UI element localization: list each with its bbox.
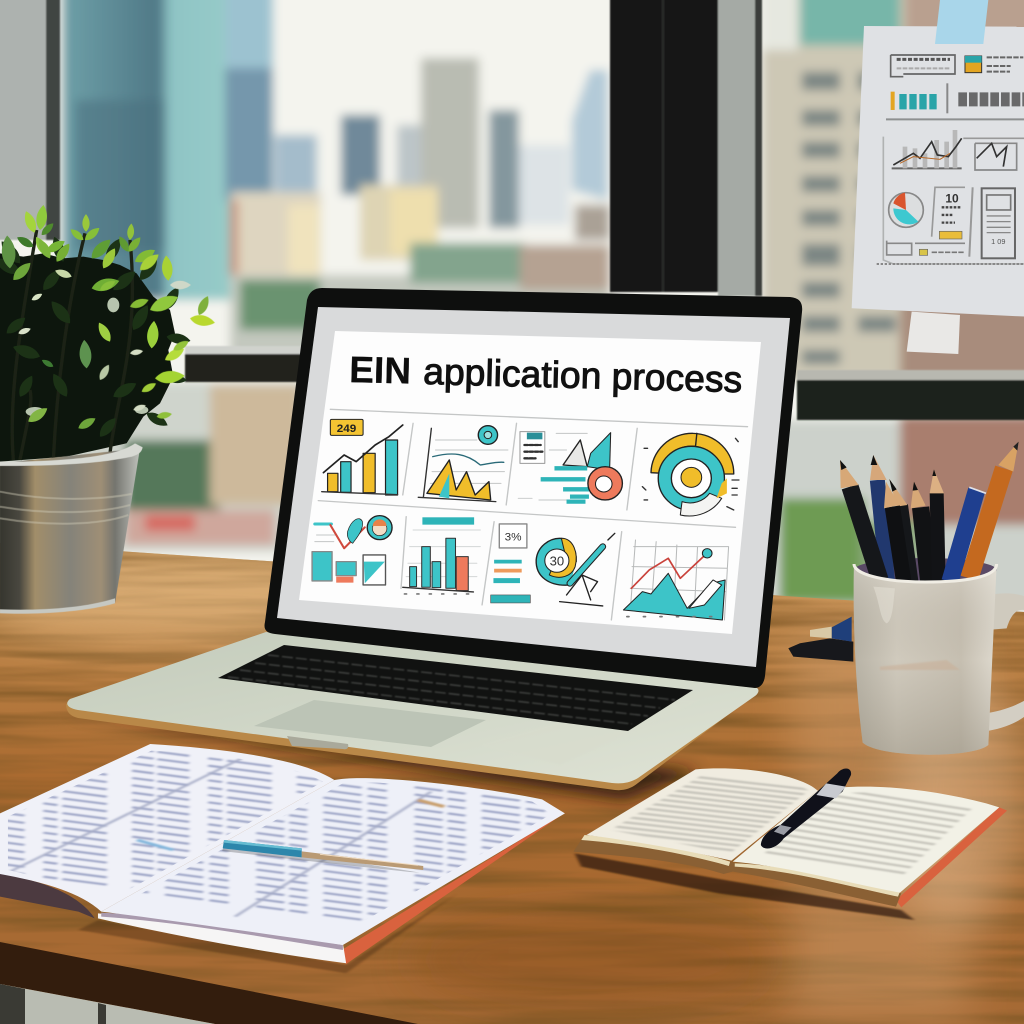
chart 7: stat box, stripes and donut — [491, 524, 615, 606]
right page — [101, 778, 565, 945]
top tape — [935, 0, 988, 44]
dark leaves — [0, 235, 191, 440]
chart 7: stat box, stripes and donut: 3% — [505, 532, 522, 544]
poster header row — [886, 55, 1024, 119]
lower right view — [770, 420, 1024, 610]
right page notes — [142, 782, 547, 922]
chart 4: donut — [642, 433, 739, 516]
screen title: EIN — [349, 349, 412, 392]
poster line chart — [883, 130, 1024, 264]
page block — [98, 913, 346, 963]
chart 1: rising bars with badge: 249 — [337, 423, 356, 435]
poster pie — [889, 193, 923, 227]
left page notes — [8, 750, 323, 888]
laptop shadow — [60, 712, 700, 800]
bottom tape — [907, 312, 960, 354]
chart 1: rising bars with badge — [322, 419, 403, 495]
mug body — [854, 564, 997, 755]
right open book — [573, 763, 1012, 920]
plant foliage — [0, 204, 216, 462]
background gaps in foliage — [26, 298, 148, 416]
black pen on book — [761, 769, 851, 848]
pinned poster — [852, 0, 1024, 354]
screen charts — [312, 409, 748, 620]
poster stat card — [877, 187, 1024, 264]
left open notebook — [0, 744, 565, 974]
book cover edge — [343, 813, 565, 964]
mug with pencils — [840, 442, 1024, 755]
left page — [586, 768, 818, 861]
book shadow — [78, 893, 457, 973]
grid dividers — [318, 409, 748, 620]
book text lines — [614, 776, 972, 874]
chart 7: stat box, stripes and donut: 30 — [550, 554, 564, 568]
book cover edge — [896, 807, 1007, 907]
chart 5: line with small boxes — [312, 516, 392, 585]
trackpad — [254, 700, 486, 747]
window view: blurred city skyline — [0, 0, 1024, 620]
lower left view — [0, 382, 310, 552]
laptop — [60, 288, 802, 800]
mug interior — [854, 558, 997, 582]
mug handle — [983, 593, 1024, 732]
laptop base — [66, 632, 758, 790]
items behind mug — [788, 617, 853, 662]
metal pot — [0, 443, 143, 614]
wooden desk — [0, 540, 1024, 1024]
poster stat card: 1 09 — [991, 237, 1005, 246]
pencils — [840, 442, 1019, 583]
keyboard — [218, 645, 693, 731]
right building — [762, 0, 1024, 380]
left page — [0, 744, 334, 912]
poster sheet — [852, 26, 1024, 317]
window frame — [0, 0, 1024, 420]
poster stat card: 10 — [945, 192, 959, 206]
latch — [287, 736, 348, 749]
book page edges — [573, 835, 901, 907]
grey screen surround — [277, 307, 790, 667]
chart 3: document, triangle and ring — [518, 432, 622, 502]
white screen panel — [299, 331, 761, 634]
right page — [733, 787, 999, 893]
chart 8: area and line — [623, 540, 729, 620]
potted plant — [0, 204, 216, 614]
book shadow — [575, 853, 914, 920]
pen on notebook — [222, 840, 423, 873]
chart 6: bars — [403, 517, 480, 594]
chart 2: area with target — [418, 426, 508, 502]
laptop lid — [264, 288, 802, 688]
screen title: application process — [423, 351, 743, 400]
